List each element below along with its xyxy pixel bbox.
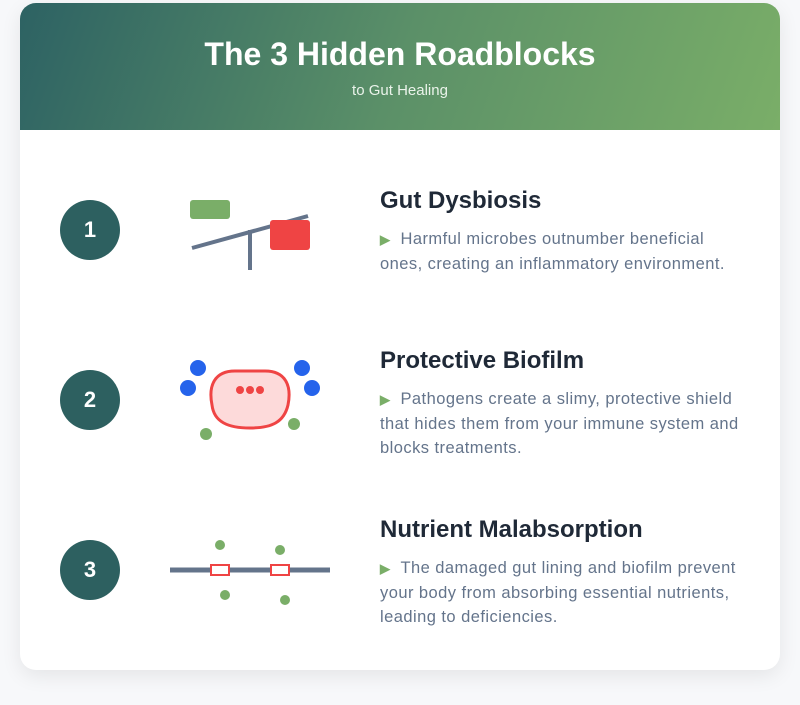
text: gut dysbiosis: ones, creating an inflammatory environment. bbox=[380, 255, 725, 273]
icon: seesaw bbox=[190, 200, 310, 270]
text: biofilm: that hides them from your immune system and bbox=[380, 415, 739, 433]
header: The 3 Hidden Roadblocks bbox=[204, 36, 596, 72]
text: gut dysbiosis bbox=[380, 187, 725, 273]
text: malabsorption: ▶ The damaged gut lining and biofilm prevent bbox=[380, 559, 736, 577]
number 2 bbox=[60, 370, 120, 430]
text: biofilm: Protective Biofilm bbox=[380, 347, 584, 374]
number 2: 2 bbox=[84, 387, 96, 412]
text: biofilm bbox=[380, 347, 739, 457]
icon: biofilm bbox=[180, 360, 320, 440]
text: gut dysbiosis: Gut Dysbiosis bbox=[380, 187, 541, 214]
text: biofilm: blocks treatments. bbox=[380, 439, 522, 457]
text: malabsorption: leading to deficiencies. bbox=[380, 608, 558, 626]
header: to Gut Healing bbox=[352, 82, 448, 99]
text: malabsorption: your body from absorbing essential nutrients, bbox=[380, 584, 730, 602]
text: malabsorption bbox=[380, 516, 736, 626]
icon: gut lining bbox=[170, 540, 330, 605]
text: biofilm: ▶ Pathogens create a slimy, protective shield bbox=[380, 390, 732, 408]
text: gut dysbiosis: ▶ Harmful microbes outnumber beneficial bbox=[380, 230, 704, 248]
number 1: 1 bbox=[84, 217, 96, 242]
number 3 bbox=[60, 540, 120, 600]
number 3: 3 bbox=[84, 557, 96, 582]
text: malabsorption: Nutrient Malabsorption bbox=[380, 516, 643, 543]
header bbox=[20, 3, 780, 130]
number 1 bbox=[60, 200, 120, 260]
